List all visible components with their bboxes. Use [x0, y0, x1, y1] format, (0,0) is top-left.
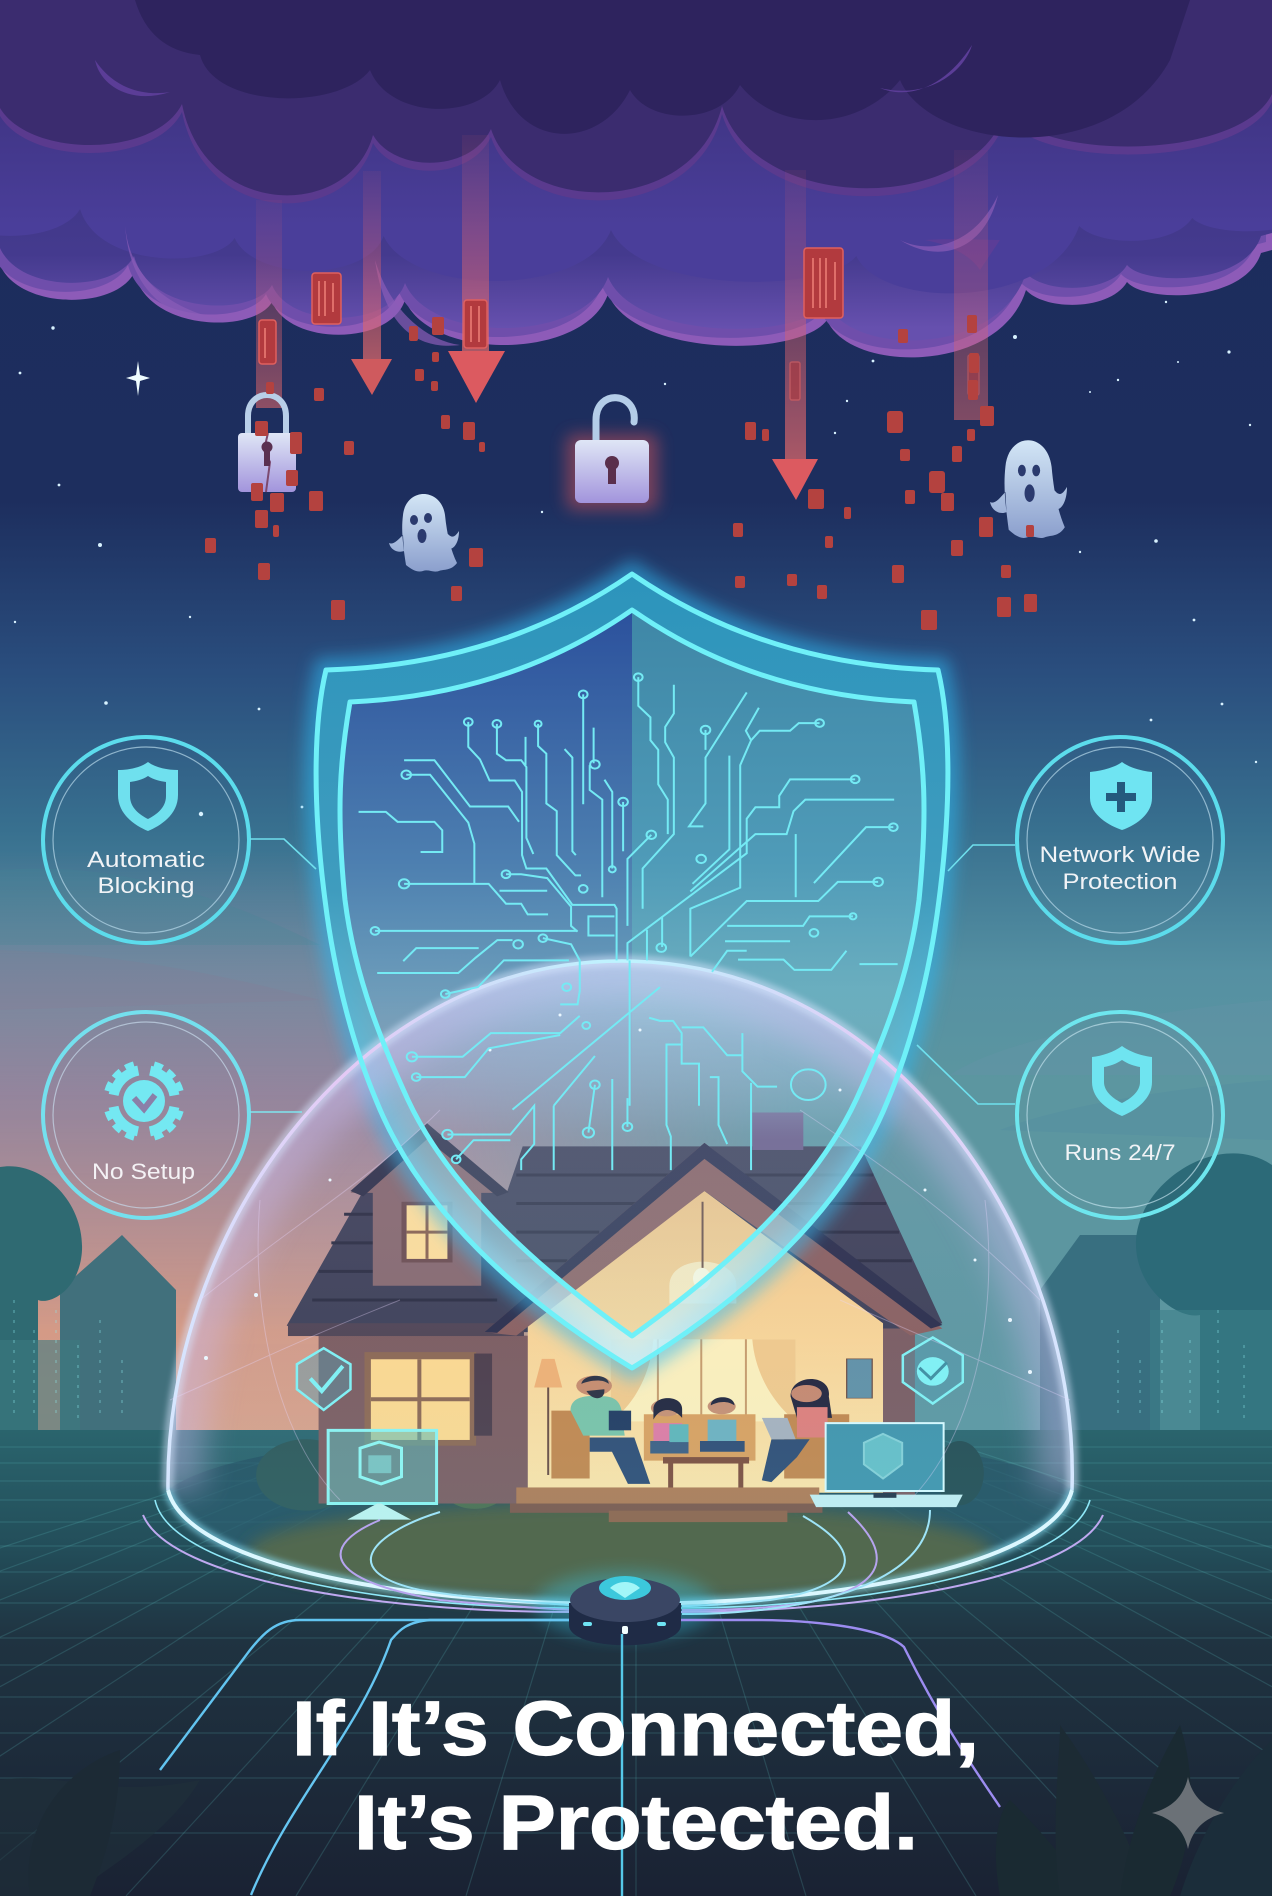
- dome rim: [168, 961, 1072, 1490]
- ghost: right: [990, 440, 1067, 538]
- left window: [365, 1352, 492, 1446]
- left wall: [319, 1336, 529, 1504]
- protective dome: [143, 961, 1103, 1614]
- pendant lamp: [669, 1202, 736, 1304]
- dome floor: [168, 1430, 1072, 1604]
- icon: shield outline: [1092, 1046, 1152, 1116]
- coffee table: [663, 1457, 749, 1487]
- steps: [609, 1511, 787, 1522]
- device: laptop: [810, 1423, 963, 1507]
- feature: Runs 24/7: [1017, 1012, 1223, 1218]
- ground grid: [0, 1430, 1272, 1896]
- dome glow rim: [168, 961, 1072, 1490]
- data columns on horizon: [14, 1300, 1244, 1420]
- dormer: [350, 1123, 509, 1286]
- feature ring: [1017, 1012, 1223, 1218]
- person: father: [571, 1376, 650, 1484]
- label: [87, 847, 205, 898]
- person: mother: [762, 1379, 832, 1482]
- wall art: [847, 1359, 872, 1398]
- sofa: [551, 1411, 849, 1479]
- network traces to foreground: [160, 1620, 1000, 1896]
- shield outlines: [316, 574, 948, 1368]
- hologram shield faces: [316, 574, 948, 1368]
- lock: open: [566, 398, 658, 510]
- foreground plants: right: [996, 1725, 1272, 1896]
- main roof: [287, 1123, 942, 1332]
- picture window with curtains: [611, 1339, 796, 1421]
- malicious data packets: [259, 248, 979, 400]
- packet glyph marks: [265, 258, 835, 358]
- dome lavender inner band: [168, 961, 1072, 1490]
- icon: check shield left: [297, 1348, 350, 1410]
- title: If It’s Connected,: [292, 1686, 979, 1772]
- roof shingle lines: [312, 1175, 912, 1300]
- icon: check shield right: [903, 1337, 963, 1404]
- label: Automatic: [87, 847, 205, 872]
- device: monitor: [328, 1430, 437, 1520]
- feature ring: [1017, 737, 1223, 943]
- beam: right: [954, 150, 988, 420]
- gable wall: [528, 1191, 883, 1493]
- router: [535, 1571, 715, 1645]
- label: No Setup: [92, 1159, 195, 1184]
- floor: [516, 1487, 819, 1505]
- title: It’s Protected.: [354, 1780, 918, 1866]
- arrow: right: [772, 170, 818, 500]
- connector: Network Wide: [948, 845, 1015, 871]
- beam: left: [256, 200, 282, 408]
- arrow: left: [351, 171, 392, 395]
- shield face left: [340, 610, 632, 1336]
- shield glow: [316, 574, 948, 1368]
- energy ring glow: [168, 1490, 1072, 1604]
- dome body: [168, 961, 1072, 1604]
- label: [1040, 842, 1200, 894]
- shield band: [316, 574, 948, 1368]
- connector: No Setup: [250, 1111, 302, 1113]
- label: Network Wide: [1040, 842, 1200, 867]
- watermark sparkle: [1152, 1777, 1224, 1849]
- label: Protection: [1062, 869, 1178, 894]
- house group: grass, house, family, devices: [168, 1112, 1072, 1604]
- energy rings: [143, 1490, 1103, 1612]
- stars: [14, 301, 1257, 816]
- feature ring: [43, 1012, 249, 1218]
- dome sparkle dots: [204, 1014, 1032, 1374]
- house drawing: [256, 1112, 984, 1522]
- person: girl: [650, 1398, 689, 1454]
- label: Runs 24/7: [1064, 1140, 1176, 1165]
- bushes: [256, 1439, 984, 1511]
- ghost: left: [389, 494, 459, 572]
- connector: Automatic Blocking: [250, 839, 316, 869]
- distant houses and trees: right: [1040, 1153, 1272, 1430]
- feature: Network Wide Protection: [1017, 737, 1223, 943]
- lock: broken: [238, 395, 296, 492]
- circuit traces: [359, 673, 898, 1170]
- lawn: [248, 1502, 992, 1602]
- feature: No Setup: [43, 1012, 249, 1218]
- person: boy: [700, 1397, 745, 1452]
- shield outlines and circuit traces: [316, 574, 948, 1368]
- red particles: [205, 315, 1037, 630]
- foreground plants: left: [0, 1750, 200, 1896]
- label: Blocking: [98, 873, 194, 898]
- icon: shield outline: [118, 762, 178, 831]
- distant houses and trees: left: [0, 1166, 176, 1430]
- feature ring: [43, 737, 249, 943]
- arrow: centre: [448, 135, 505, 403]
- storm cloud: [0, 0, 1272, 357]
- sparkle star: [126, 361, 150, 396]
- icon: shield with plus: [1090, 762, 1152, 830]
- connector: Runs 24/7: [917, 1045, 1015, 1104]
- shield face right: [632, 610, 924, 1336]
- background: night sky to dusk: [0, 528, 1272, 1430]
- chimney: [752, 1112, 803, 1150]
- falling threat beams and arrows: [256, 135, 988, 500]
- device wires: [341, 1510, 930, 1614]
- icon: gear with check: [106, 1063, 182, 1139]
- floor lamp: [534, 1359, 562, 1475]
- constellation lines: [170, 1110, 1070, 1500]
- title: [292, 1686, 979, 1866]
- feature: Automatic Blocking: [43, 737, 249, 943]
